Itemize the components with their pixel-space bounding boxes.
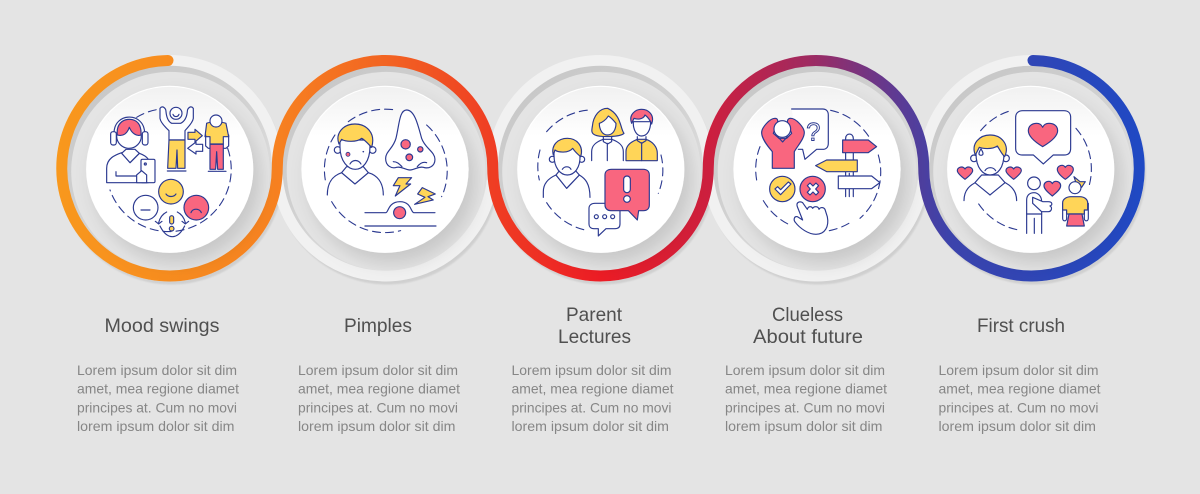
description: parent lectures: amet, mea regione diamet [512, 381, 674, 397]
description: first crush [938, 362, 1101, 434]
description: clueless about future: lorem ipsum dolor sit dim [725, 418, 882, 434]
description: parent lectures: lorem ipsum dolor sit dim [512, 418, 669, 434]
description: pimples: lorem ipsum dolor sit dim [298, 418, 456, 434]
title: first crush: First crush [977, 315, 1065, 337]
title: clueless about future: Clueless [772, 304, 843, 326]
title: parent lectures: Parent [566, 304, 623, 326]
icon: parent lectures [538, 108, 663, 236]
description: clueless about future [725, 362, 887, 434]
description: parent lectures: principes at. Cum no movi [512, 399, 672, 415]
description: first crush: principes at. Cum no movi [938, 399, 1098, 415]
icon: first crush [957, 111, 1091, 233]
description: pimples [298, 362, 460, 434]
icon: clueless about future: ? [806, 119, 820, 147]
description: clueless about future: principes at. Cum no movi [725, 399, 885, 415]
title: parent lectures [558, 304, 631, 348]
title: clueless about future: About future [753, 326, 863, 348]
ring bases with shadows [59, 60, 1146, 284]
description: first crush: amet, mea regione diamet [938, 381, 1101, 397]
title: pimples: Pimples [344, 315, 412, 337]
description: first crush: Lorem ipsum dolor sit dim [938, 362, 1098, 378]
icon: mood swings [107, 107, 231, 237]
description: pimples: principes at. Cum no movi [298, 399, 458, 415]
description: clueless about future: amet, mea regione diamet [725, 381, 887, 397]
white disc [948, 86, 1114, 252]
title: parent lectures: Lectures [558, 326, 631, 348]
panel: pimples [298, 86, 468, 434]
icon: pimples [324, 109, 447, 233]
description: mood swings: Lorem ipsum dolor sit dim [77, 362, 237, 378]
title: mood swings: Mood swings [104, 315, 220, 337]
serpentine gradient ribbon [62, 60, 1139, 276]
description: pimples: Lorem ipsum dolor sit dim [298, 362, 458, 378]
description: first crush: lorem ipsum dolor sit dim [938, 418, 1096, 434]
description: mood swings: amet, mea regione diamet [77, 381, 239, 397]
title: clueless about future [753, 304, 863, 348]
white disc [518, 86, 684, 252]
panel: parent lectures [512, 86, 684, 434]
panel: first crush [938, 86, 1114, 434]
icon: clueless about future [756, 109, 881, 234]
white disc [302, 86, 468, 252]
description: mood swings [77, 362, 239, 434]
description: clueless about future: Lorem ipsum dolor sit dim [725, 362, 885, 378]
panel: mood swings [77, 86, 253, 434]
white disc [734, 86, 900, 252]
description: mood swings: principes at. Cum no movi [77, 399, 237, 415]
white disc [87, 86, 253, 252]
description: parent lectures [512, 362, 674, 434]
panel: clueless about future [725, 86, 900, 434]
description: mood swings: lorem ipsum dolor sit dim [77, 418, 234, 434]
description: pimples: amet, mea regione diamet [298, 381, 460, 397]
description: parent lectures: Lorem ipsum dolor sit dim [512, 362, 672, 378]
